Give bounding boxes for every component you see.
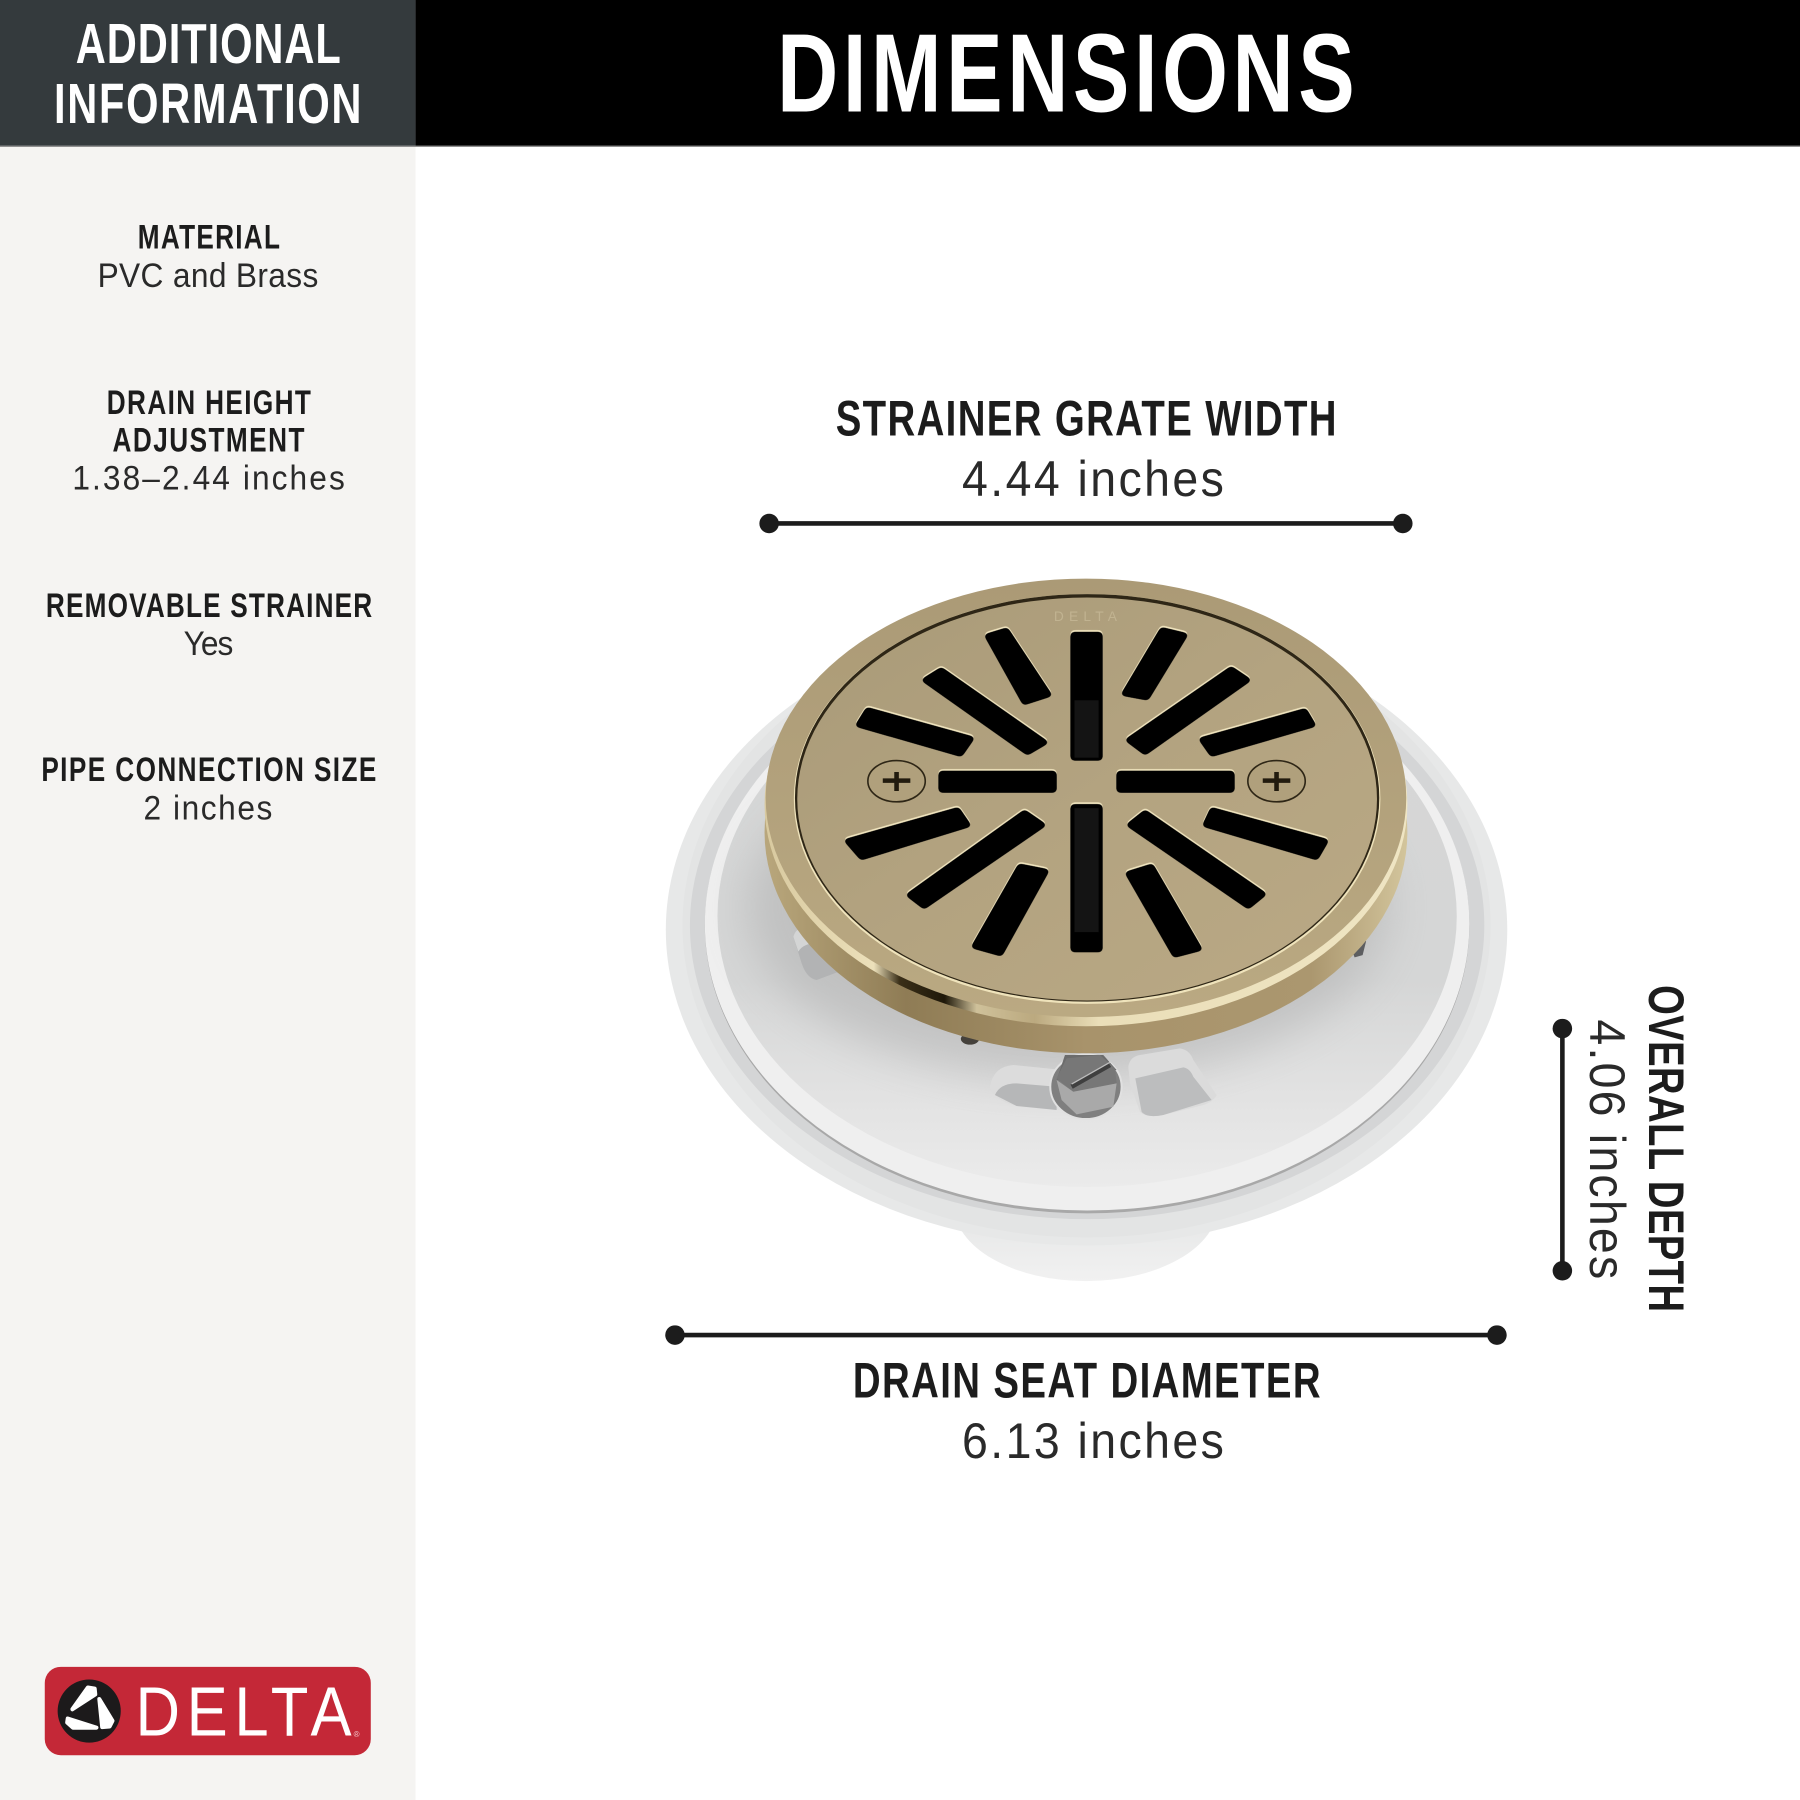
inner plate xyxy=(797,598,1377,1000)
left clamp tab xyxy=(793,929,843,980)
right clamp nub xyxy=(1351,934,1366,957)
adjustment bolt xyxy=(1050,1054,1122,1119)
main title: DIMENSIONS xyxy=(777,10,1355,135)
panel: dimensions header xyxy=(416,0,1800,146)
spec: pipe connection size xyxy=(41,751,376,828)
inner seat disc xyxy=(717,645,1457,1187)
spec: removable strainer: REMOVABLE STRAINER xyxy=(46,587,372,625)
spec: removable strainer: Yes xyxy=(184,625,233,663)
spec: pipe connection size: PIPE CONNECTION SIZE xyxy=(41,751,376,789)
slot highlights xyxy=(844,626,1329,956)
drain pipe xyxy=(954,1130,1218,1281)
strainer grate width dimension xyxy=(759,389,1413,533)
spec: removable strainer xyxy=(46,587,372,663)
product illustration: shower drain xyxy=(666,579,1507,1281)
flange grey groove xyxy=(690,631,1484,1219)
logo: Delta xyxy=(45,1667,371,1755)
small dark nub xyxy=(961,1033,979,1045)
spec: material: MATERIAL xyxy=(138,218,280,256)
spec: material xyxy=(98,218,318,295)
drain seat diameter dimension xyxy=(665,1325,1507,1469)
drain seat outer flange xyxy=(666,614,1507,1246)
sidebar heading: INFORMATION xyxy=(54,73,361,135)
spec: drain height adjustment: ADJUSTMENT xyxy=(113,421,305,460)
radial slots xyxy=(844,627,1329,957)
strainer grate width dimension: STRAINER GRATE WIDTH xyxy=(836,389,1336,447)
grate shadow xyxy=(746,735,1389,1079)
clamp recess xyxy=(990,1048,1217,1119)
engraved brand: DELTA xyxy=(1054,609,1118,624)
rim bright band xyxy=(765,582,1407,1026)
slot interior shading xyxy=(1074,700,1099,932)
overall depth dimension: 4.06 inches xyxy=(1578,1019,1635,1279)
spec: drain height adjustment: DRAIN HEIGHT xyxy=(107,383,311,422)
spec: drain height adjustment xyxy=(72,383,345,498)
flange ring xyxy=(705,637,1469,1213)
grate side rim xyxy=(765,611,1407,1053)
spec: pipe connection size: 2 inches xyxy=(143,789,272,828)
drain seat diameter dimension: DRAIN SEAT DIAMETER xyxy=(853,1351,1321,1409)
logo: Delta: DELTA xyxy=(135,1672,352,1751)
spec: material: PVC and Brass xyxy=(98,257,318,295)
logo: Delta: ® xyxy=(354,1730,360,1739)
panel: additional information sidebar xyxy=(0,0,416,1800)
inner plate groove xyxy=(794,594,1380,1004)
sidebar heading: ADDITIONAL xyxy=(76,13,341,76)
drain seat diameter dimension: 6.13 inches xyxy=(962,1413,1224,1469)
brass grate xyxy=(765,579,1407,1053)
grate top face xyxy=(766,579,1406,1017)
strainer grate width dimension: 4.44 inches xyxy=(962,451,1224,507)
right screw xyxy=(1248,761,1305,802)
overall depth dimension: OVERALL DEPTH xyxy=(1638,985,1695,1312)
recess right tab xyxy=(1128,1048,1217,1116)
overall depth dimension xyxy=(1553,985,1695,1312)
sidebar heading xyxy=(0,0,416,146)
spec: drain height adjustment: 1.38–2.44 inches xyxy=(72,459,345,498)
recess left lobe xyxy=(990,1065,1063,1110)
left screw xyxy=(868,761,925,802)
